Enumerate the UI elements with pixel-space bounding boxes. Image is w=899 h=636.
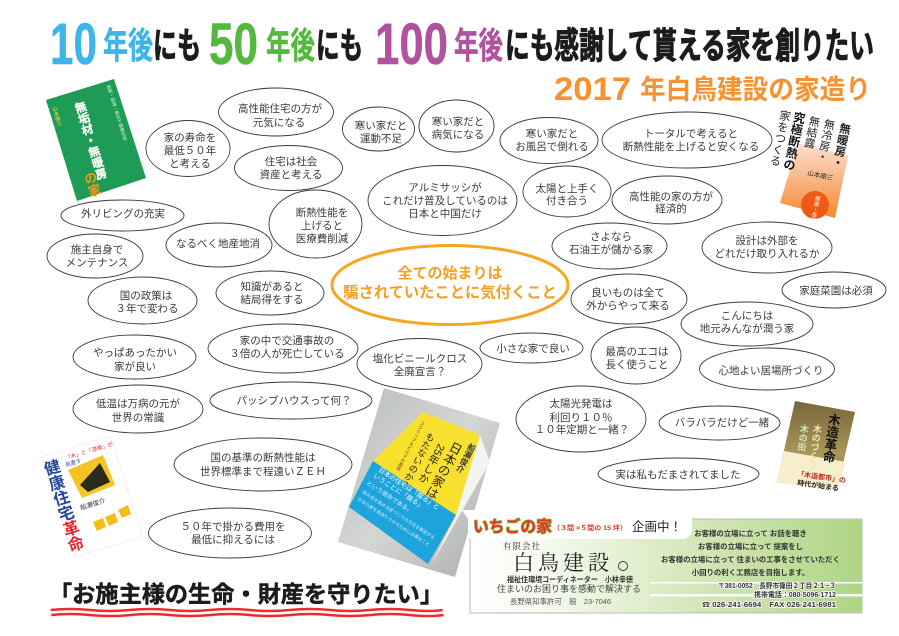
book: health house revolution cover: 見直す: [64, 456, 83, 469]
company name block: [497, 541, 641, 606]
book: wood revolution cover: 木のづくり: [806, 423, 823, 470]
bubble: 結局得をする: [240, 293, 304, 306]
book: insulation cover: 健康・長寿: [809, 194, 821, 223]
book: photo of blue and yellow book: 25年しか: [416, 442, 447, 486]
book: wood revolution cover: 時代が始まる: [797, 478, 840, 493]
bubble: [174, 438, 352, 491]
bubble: 心地よい居場所づくり: [718, 364, 824, 377]
subtitle: 2017: [554, 71, 631, 107]
bubble: ５０年で掛かる費用を: [180, 520, 286, 533]
bubble: 最低５０年: [164, 144, 216, 157]
bubble: 外リビングの充実: [81, 207, 165, 220]
book: insulation cover: 家をつくる: [768, 108, 792, 167]
company name block: 有限会社: [503, 541, 541, 551]
bubble: 太陽と上手く: [536, 182, 598, 195]
book: photo of blue and yellow book: [338, 388, 500, 577]
bubble: 家の中で交通事故の: [240, 334, 334, 347]
bubble: [702, 222, 832, 273]
bubble: どれだけ取り入れるか: [714, 248, 820, 260]
bubble: [73, 385, 203, 433]
bubble: [218, 88, 334, 136]
bubble: 世界標準まで程遠いＺＥＨ: [200, 465, 326, 478]
company statements: お客様の立場に立って 提案をし: [698, 542, 803, 551]
bubble: [73, 335, 196, 379]
bubble: [571, 274, 687, 324]
book: insulation cover: 山本順三: [807, 168, 834, 182]
bubble: [523, 166, 611, 217]
bubble: メンテナンス: [66, 257, 128, 269]
bubble: 国の政策は: [120, 289, 172, 302]
bubble: なるべく地産地消: [176, 237, 260, 250]
title: 年後: [266, 25, 315, 66]
bubble: 最低に抑えるには: [191, 533, 275, 546]
bubble: [782, 272, 886, 308]
book: health house revolution cover: 健康住宅: [39, 457, 76, 524]
bubble: [234, 146, 342, 190]
bubble: 設計は外部を: [736, 235, 798, 247]
bubble: 施主自身で: [71, 243, 123, 256]
company statements: [661, 529, 840, 577]
title: [50, 12, 874, 77]
book: green cover: 山本順三: [51, 105, 62, 127]
bubble: ３倍の人が死亡している: [229, 347, 345, 360]
bubble: 小さな家で良い: [496, 342, 570, 355]
bubble: [146, 120, 230, 176]
book: green cover: 無垢材・無暖房: [72, 99, 109, 182]
bubble: 全廃宣言？: [394, 365, 446, 378]
bubble: [419, 100, 494, 152]
book: wood revolution cover: 木造革命: [820, 411, 841, 464]
bubble: 実は私もだまされてました: [616, 468, 740, 481]
callout: central message: [332, 246, 568, 324]
bubble: [659, 406, 780, 440]
bubble: これだけ普及しているのは: [382, 194, 508, 207]
bubble: [368, 166, 517, 236]
bubble: [598, 458, 759, 490]
bubble: １０年定期と一緒？: [535, 423, 629, 436]
bubble: 低温は万病の元が: [96, 397, 180, 410]
bubble: 利回り１０％: [550, 412, 612, 424]
title: 50: [209, 12, 258, 77]
bubble: 家の寿命を: [164, 131, 216, 144]
book: photo of blue and yellow book: という宿命である。: [365, 479, 415, 515]
bubble: アルミサッシが: [408, 181, 482, 194]
title: 年後: [103, 25, 153, 66]
book: health house revolution cover: 「木」と「漆喰」が: [64, 440, 114, 462]
contact details: [702, 581, 836, 609]
book: photo of blue and yellow book: もたないのか？: [398, 430, 436, 491]
bubble: ３年で変わる: [116, 302, 178, 315]
bubble: バラバラだけど一緒: [675, 416, 770, 429]
bubble: [357, 338, 482, 390]
bubble: 家庭菜園は必須: [799, 284, 873, 297]
bubble: 資産と考える: [260, 168, 322, 181]
bubble: [700, 348, 834, 390]
book: green cover: 断熱・耐震・換気で健康住宅: [105, 83, 129, 142]
book: photo of blue and yellow book: 日本の家を長持ちさせるために必要なこと: [356, 496, 431, 548]
bubble: やっぱあったかい: [93, 347, 177, 359]
book: photo of blue and yellow book: いうことに「腐る」: [372, 471, 426, 511]
company statements: 小回りの利く工務店を目指します。: [692, 568, 809, 577]
planning headline: [473, 517, 682, 536]
callout: central message: 騙されていたことに気付くこと: [343, 284, 557, 302]
bubble: [269, 190, 362, 258]
book: insulation cover: 究極断熱の: [781, 109, 807, 172]
bubble: 上げると: [301, 220, 343, 232]
contact details: 携帯電話：080-5096-1712: [754, 590, 836, 599]
bubble: 高性能の家の方が: [629, 190, 713, 203]
book: green cover: の家: [81, 170, 103, 199]
book: health house revolution cover: [39, 436, 143, 557]
bubble: 経済的: [655, 202, 687, 215]
book: photo of blue and yellow book: 日本の住宅は「腐る」と: [377, 465, 442, 512]
company name block: 白鳥建設: [513, 551, 613, 575]
company statements: お客様の立場に立って 住まいの工事をさせていただく: [661, 555, 840, 564]
book: wood revolution cover: 「木造都市」の: [797, 469, 846, 485]
book: insulation cover: 無暖房・: [830, 121, 852, 169]
title: 年後: [454, 25, 503, 66]
panel: company information: [462, 510, 862, 613]
bubble: 医療費削減: [296, 232, 349, 245]
bubble: と考える: [169, 158, 211, 170]
planning headline: （３間 ×５間の 15 坪）: [553, 523, 627, 532]
bubble: [342, 107, 414, 151]
bubble: [516, 386, 646, 452]
bubble: 地元みんなが潤う家: [700, 322, 795, 335]
bubble: [210, 382, 372, 419]
company name block: 住まいのお困り事を感動で解決する: [497, 583, 641, 594]
bubble: 寒い家だと: [355, 119, 407, 132]
title: にも: [316, 25, 363, 66]
bubble: 寒い家だと: [432, 115, 484, 128]
book: wood revolution cover: [777, 401, 855, 493]
callout: central message: 全ての始まりは: [397, 264, 503, 282]
bubble: 高性能住宅の方が: [238, 102, 322, 115]
bubble: 知識があると: [240, 280, 304, 293]
bubble: さよなら: [590, 231, 632, 243]
bubble: 長く使うこと: [606, 358, 668, 371]
book: green cover: [46, 79, 146, 201]
bubble: 最高のエコは: [606, 345, 668, 358]
contact details: ☎ 026-241-6694 FAX 026-241-6981: [702, 602, 836, 609]
book: photo of blue and yellow book: 耐久性を高める家づくりの方法を解説する: [361, 489, 436, 541]
bubble: [681, 302, 813, 346]
bubble: 石油王が儲かる家: [569, 243, 653, 256]
title: にも: [153, 25, 201, 66]
bubble: 太陽光発電は: [550, 397, 612, 410]
bubble: [552, 223, 667, 269]
book: photo of blue and yellow book: 日本の家は: [422, 439, 464, 501]
bubble: 外からやって来る: [586, 300, 670, 312]
bubble: 世界の常識: [112, 411, 165, 424]
company name block: 福祉住環境コーディネーター 小林幸徳: [507, 575, 634, 584]
book: insulation cover: [768, 108, 852, 223]
company statements: お客様の立場に立って お話を聴き: [694, 529, 807, 538]
bubble: 塩化ビニールクロス: [373, 352, 467, 365]
title: 10: [50, 12, 97, 77]
bubble: 断熱性能を上げると安くなる: [623, 140, 759, 153]
bubble: 断熱性能を: [296, 206, 348, 219]
bubble: 住宅は社会: [265, 155, 318, 168]
planning headline: 企画中！: [632, 519, 682, 534]
bubble: 日本と中国だけ: [408, 207, 482, 220]
bubble: [166, 223, 272, 267]
contact details: 〒381-0052 長野市篠田２丁目２１−３: [718, 581, 836, 590]
subtitle: [554, 71, 871, 107]
book: photo of blue and yellow book: 船瀬俊介: [454, 441, 478, 475]
book: health house revolution cover: 革命: [58, 518, 86, 555]
bubble: 運動不足: [360, 132, 402, 145]
bubble: 家が良い: [114, 360, 156, 373]
bubble: [612, 176, 722, 224]
bubble: [480, 333, 583, 363]
bubble: 国の基準の断熱性能は: [210, 451, 316, 464]
bubble: [216, 271, 324, 315]
book: health house revolution cover: 船瀬俊介: [79, 496, 107, 512]
slogan: 「お施主様の生命・財産を守りたい」: [49, 581, 443, 607]
subtitle: 年白鳥建設の家造り: [640, 75, 871, 105]
book: insulation cover: 無結露: [802, 113, 821, 149]
bubble: [61, 200, 184, 231]
book: insulation cover: 無冷房・: [815, 116, 836, 163]
company name block: 長野県知事許可 般 23-7046: [510, 597, 611, 606]
bubble: 良いものは全て: [591, 286, 665, 299]
bubble: 寒い家だと: [526, 127, 578, 140]
book: photo of blue and yellow book: スクラップ＆ビルドの真実: [395, 420, 426, 473]
bubble: 病気になる: [432, 128, 484, 141]
bubble: 付き合う: [546, 194, 588, 207]
bubble: 元気になる: [253, 116, 305, 129]
book: wood revolution cover: 木の街: [796, 423, 810, 453]
bubble: トータルで考えると: [644, 128, 738, 140]
bubble: [591, 327, 681, 384]
bubble: [602, 112, 772, 168]
bubble: [208, 324, 358, 373]
bubble: [148, 508, 312, 558]
bubble: [88, 277, 197, 324]
bubble: お風呂で倒れる: [515, 140, 589, 153]
bubble: こんにちは: [721, 310, 773, 322]
title: 100: [375, 12, 448, 77]
planning headline: いちごの家: [473, 517, 552, 536]
bubble: パッシブハウスって何？: [237, 394, 351, 407]
bubble: [500, 118, 598, 164]
bubble: [47, 234, 143, 278]
